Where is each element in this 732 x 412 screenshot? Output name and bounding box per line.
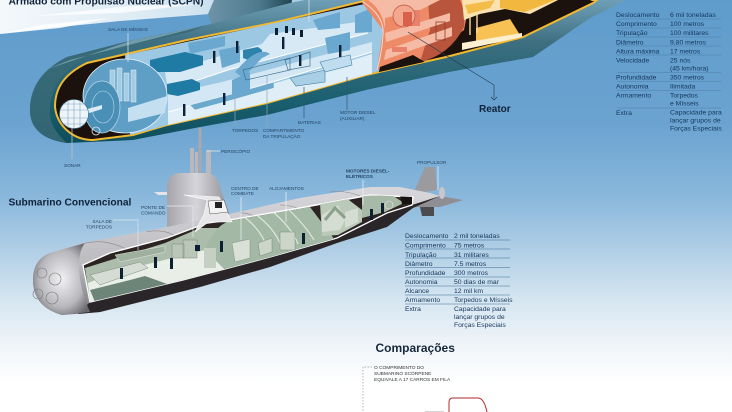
spec table: nuclear submarine: lançar grupos de	[670, 118, 721, 124]
label: motor diesel: (AUXILIAR)	[340, 116, 365, 121]
forward fin	[154, 192, 167, 195]
spec table: conventional submarine: 12 mil km	[454, 288, 483, 295]
label: alojamentos	[269, 186, 304, 222]
label: periscópio: PERISCÓPIO	[221, 148, 251, 154]
reactor callout and arrow: Reator	[479, 104, 511, 115]
label: baterias: BATERIAS	[298, 120, 321, 125]
missile room cargo	[150, 52, 203, 72]
spec table: nuclear submarine: 100 metros	[670, 21, 705, 28]
spec table: conventional submarine: 2 mil toneladas	[454, 233, 500, 240]
spec table: nuclear submarine: 6 mil toneladas	[670, 12, 716, 19]
sonar sphere	[60, 100, 88, 128]
spec table: nuclear submarine: Comprimento	[616, 21, 657, 28]
label: centro de combate: CENTRO DE	[231, 186, 259, 191]
label: periscópio	[207, 148, 251, 154]
spec table: nuclear submarine: (45 km/hora)	[670, 65, 709, 72]
spec table: conventional submarine: Alcance	[405, 288, 429, 295]
label: compartimento da tripulação: COMPARTIMENTO	[263, 128, 305, 133]
spec table: conventional submarine: Forças Especiais	[454, 322, 506, 329]
label: compartimento da tripulação: DA TRIPULAÇÃO	[263, 133, 301, 139]
label: baterias	[298, 87, 321, 125]
spec table: conventional submarine: 75 metros	[454, 242, 485, 250]
spec table: conventional submarine: Autonomia	[405, 279, 438, 286]
label: alojamentos: ALOJAMENTOS	[269, 186, 304, 191]
spec table: conventional submarine: 50 dias de mar	[454, 279, 500, 286]
label: propulsor: PROPULSOR	[417, 160, 447, 165]
sail	[208, 0, 292, 29]
label: motores diesel-elétricos: MOTORES DIESEL-	[346, 168, 390, 174]
crew figures	[183, 26, 341, 116]
label: torpedos	[232, 96, 258, 133]
comparison drawing: outline	[425, 398, 487, 412]
spec table: conventional submarine	[405, 233, 513, 329]
comparison note: O COMPRIMENTO DO	[374, 365, 424, 371]
label: sala de mísseis	[108, 26, 148, 62]
label: centro de combate	[231, 186, 259, 240]
spec table: nuclear submarine: Autonomia	[616, 84, 649, 90]
label: sala de torpedos	[86, 219, 138, 250]
comparison note: EQUIVALE A 17 CARROS EM FILA	[374, 377, 451, 383]
spec table: nuclear submarine: Forças Especiais	[670, 126, 722, 132]
heading: comparações: Comparações	[376, 341, 455, 355]
command bridge	[184, 195, 232, 232]
nuclear submarine	[30, 0, 626, 143]
spec table: nuclear submarine: e Mísseis	[670, 100, 699, 108]
spec table: nuclear submarine: 17 metros	[670, 48, 701, 56]
spec table: nuclear submarine: 9,80 metros	[670, 40, 706, 46]
label: sala de torpedos: TORPEDOS	[86, 224, 112, 230]
crew compartment	[125, 0, 383, 135]
reactor section	[360, 0, 470, 76]
conventional sail	[167, 173, 232, 232]
comparison note: SUBMARINO SCÓRPENE	[374, 370, 431, 377]
outer hull	[30, 0, 626, 143]
label: ponte de comando	[141, 205, 193, 237]
spec table: nuclear submarine: 350 metros	[670, 74, 705, 82]
spec table: conventional submarine: Extra	[405, 306, 421, 313]
spec table: nuclear submarine: Ilimitada	[670, 84, 696, 90]
grey outer hull	[33, 187, 440, 315]
spec table: conventional submarine: 7.5 metros	[454, 261, 487, 268]
engine room	[462, 0, 592, 50]
spec table: conventional submarine: Profundidade	[405, 270, 446, 277]
sea surface and sky wisps	[0, 0, 366, 34]
spec table: nuclear submarine: Profundidade	[616, 74, 657, 82]
spec table: conventional submarine: Tripulação	[405, 252, 437, 259]
spec table: conventional submarine: Capacidade para	[454, 306, 506, 313]
label: motores diesel-elétricos	[346, 168, 390, 205]
cutaway interior	[83, 195, 413, 302]
tail fins	[413, 167, 463, 216]
spec table: conventional submarine: Deslocamento	[405, 233, 449, 240]
label: sonar: SONAR	[64, 163, 81, 168]
label: compartimento da tripulação	[263, 76, 305, 139]
spec table: nuclear submarine: Armamento	[616, 92, 651, 100]
spec table: conventional submarine: Armamento	[405, 297, 440, 304]
missile room bulkhead	[83, 59, 167, 135]
conventional submarine	[33, 128, 463, 315]
reactor callout and arrow	[408, 32, 511, 115]
label: sonar	[64, 128, 81, 168]
label: sala de torpedos: SALA DE	[92, 219, 112, 224]
spec table: conventional submarine: lançar grupos de	[454, 314, 505, 321]
label: centro de combate: COMBATE	[231, 191, 254, 196]
spec table: nuclear submarine	[616, 12, 722, 132]
spec table: nuclear submarine: 25 nós	[670, 58, 691, 64]
spec table: nuclear submarine: Torpedos	[670, 92, 699, 100]
label: ponte de comando: PONTE DE	[141, 205, 165, 210]
spec table: nuclear submarine: 100 militares	[670, 30, 709, 37]
label: torpedos: TORPEDOS	[232, 128, 258, 133]
spec table: nuclear submarine: Altura máxima	[616, 48, 660, 56]
spec table: nuclear submarine: Capacidade para	[670, 110, 722, 116]
comparison note	[363, 365, 451, 412]
spec table: nuclear submarine: Deslocamento	[616, 12, 660, 19]
spec table: nuclear submarine: Velocidade	[616, 58, 649, 64]
spec table: nuclear submarine: Tripulação	[616, 30, 648, 37]
label: motores diesel-elétricos: ELÉTRICOS	[346, 172, 373, 179]
label: sala de mísseis: SALA DE MÍSSEIS	[108, 26, 148, 32]
label: propulsor	[417, 160, 447, 190]
spec table: conventional submarine: Diâmetro	[405, 261, 433, 268]
spec table: conventional submarine: 31 militares	[454, 252, 489, 259]
spec table: conventional submarine: 300 metros	[454, 270, 489, 277]
heading: conventional submarine: Submarino Convencional	[8, 198, 132, 208]
top leader line	[308, 0, 310, 22]
label: motor diesel	[340, 77, 376, 121]
hull yellow outline	[55, 0, 597, 140]
spec table: nuclear submarine: Extra	[616, 110, 632, 117]
label: motor diesel: MOTOR DIESEL	[340, 110, 376, 115]
spec table: conventional submarine: Torpedos e Mísseis	[454, 297, 513, 304]
masts	[190, 128, 211, 175]
spec table: conventional submarine: Comprimento	[405, 242, 446, 250]
spec table: nuclear submarine: Diâmetro	[616, 40, 644, 46]
label: ponte de comando: COMANDO	[141, 210, 166, 216]
crew figures	[120, 203, 384, 279]
